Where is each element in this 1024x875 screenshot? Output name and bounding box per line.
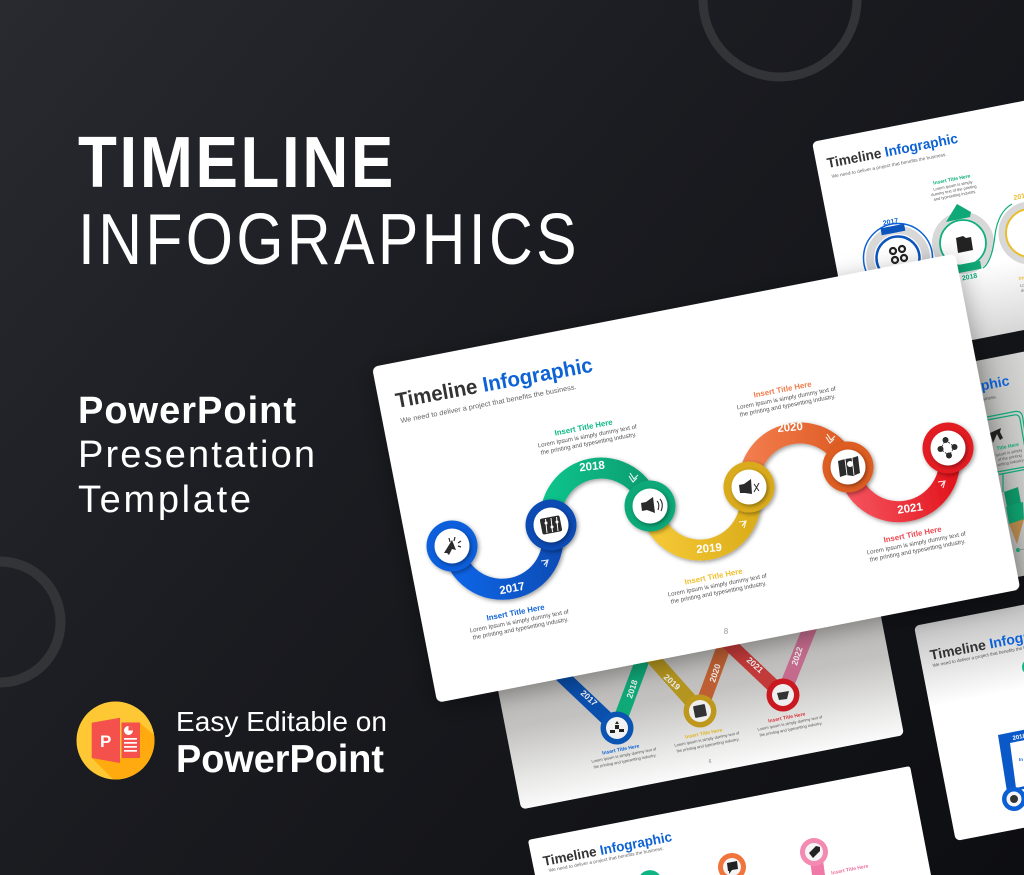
text 2017: Lorem Ipsum is simply dummy text of xyxy=(591,746,658,764)
text: 2018 xyxy=(535,413,639,457)
node: 2020 mute xyxy=(724,462,774,512)
year labels: 2020 xyxy=(777,421,803,435)
frame text xyxy=(994,441,1024,467)
text 2021: the printing and typesetting industry. xyxy=(759,720,823,737)
text: 2021: the printing and typesetting industry. xyxy=(869,538,967,564)
text 2017: Insert Title Here xyxy=(602,743,640,757)
node: 2019 speaker xyxy=(624,480,676,532)
year labels: 2020 xyxy=(707,662,723,684)
text 2021: Lorem Ipsum is simply dummy text of xyxy=(757,714,824,732)
text: yellow title partial xyxy=(1018,274,1024,293)
text 2021 xyxy=(756,708,825,738)
text: 2019: the printing and typesetting industry. xyxy=(670,580,768,606)
text: 2019: Lorem Ipsum is simply dummy text of xyxy=(667,572,768,599)
frame text: Title Here xyxy=(996,442,1020,452)
subheading: We need to deliver a project that benefits the business. xyxy=(400,384,577,425)
label: Easy Editable on PowerPoint: PowerPoint xyxy=(176,738,384,781)
orange node xyxy=(718,853,746,875)
circular item 2017: 2017 xyxy=(882,218,899,227)
year labels: 2018 xyxy=(579,460,606,474)
year labels: 2021 xyxy=(745,655,766,675)
text 2017 xyxy=(590,740,659,770)
icon: PowerPoint badge: P xyxy=(100,732,111,751)
label: Easy Editable on PowerPoint: Easy Editable on xyxy=(176,706,387,737)
text: 2017: Insert Title Here xyxy=(486,602,546,623)
frame text: Ipsum is simply xyxy=(995,447,1023,457)
green node partial xyxy=(1022,659,1024,675)
page number: 6 xyxy=(709,759,712,765)
circular item 2018 xyxy=(936,204,990,282)
timeline arcs xyxy=(452,433,950,589)
subtitle: PowerPoint Presentation Template: PowerPoint xyxy=(78,390,296,432)
slide: right pencil timeline xyxy=(700,350,1024,631)
subtitle: PowerPoint Presentation Template xyxy=(78,390,315,521)
text: green title xyxy=(929,173,978,202)
text: 2020: Lorem Ipsum is simply dummy text of xyxy=(736,385,837,412)
text: green title: dummy text of the printing xyxy=(931,183,977,197)
text: 2020 xyxy=(734,375,838,419)
subtitle: PowerPoint Presentation Template: Template xyxy=(78,479,251,521)
node: 2017 cursor xyxy=(426,520,478,572)
circular item 2017 xyxy=(864,218,932,292)
slide: top right circular timeline xyxy=(812,77,1024,363)
text: 2017 xyxy=(467,598,571,642)
label: Easy Editable on PowerPoint xyxy=(176,706,387,781)
bands xyxy=(540,615,815,728)
node: 2021 map xyxy=(822,442,874,492)
blue frame: In xyxy=(1019,757,1023,762)
frame text: of the printing xyxy=(997,453,1022,462)
text: 2017: Lorem Ipsum is simply dummy text of xyxy=(469,608,570,635)
slide: top right circular timeline: We need to deliver a project that benefits the business. xyxy=(831,152,947,179)
year labels: 2017 xyxy=(498,581,526,597)
title: Timeline Infographics: INFOGRAPHICS xyxy=(78,200,580,280)
text: 2021 xyxy=(864,520,968,564)
blue frame xyxy=(998,728,1024,811)
icon: PowerPoint badge xyxy=(76,702,154,780)
slide heading: Timeline Infographic xyxy=(826,130,959,171)
green frame xyxy=(987,411,1024,492)
text: 2019: Insert Title Here xyxy=(684,566,744,587)
slide: right pencil timeline: Timeline Infographic xyxy=(873,372,1011,414)
text: green title: and typesetting industry. xyxy=(933,189,976,202)
year labels: 2022 xyxy=(789,645,805,667)
node 2021 xyxy=(766,678,800,712)
icon: pencil xyxy=(1004,487,1024,552)
text 2019 xyxy=(673,724,742,754)
node: 2018 sliders xyxy=(526,500,576,550)
main slide xyxy=(372,254,1020,703)
text: 2018: Lorem Ipsum is simply dummy text of xyxy=(537,423,638,450)
heading: Timeline Infographic xyxy=(394,354,595,413)
year labels xyxy=(579,645,805,708)
page number: 8 xyxy=(724,627,729,636)
text: 2017: the printing and typesetting industry. xyxy=(472,616,570,642)
text: 2018: Insert Title Here xyxy=(554,417,614,438)
green node xyxy=(640,870,660,875)
text: 2020: the printing and typesetting industry. xyxy=(739,393,837,419)
text: 2021: Lorem Ipsum is simply dummy text of xyxy=(866,530,967,557)
year labels: 2019 xyxy=(696,542,722,556)
text: 2020: Insert Title Here xyxy=(753,379,813,400)
text 2019: Lorem Ipsum is simply dummy text of xyxy=(674,730,741,748)
text: 2019 xyxy=(665,562,769,606)
pink node xyxy=(800,838,828,875)
slide: bottom timeline: Timeline Infographic xyxy=(542,829,674,869)
year labels: 2018 xyxy=(624,678,640,700)
text: 2018: the printing and typesetting industry. xyxy=(540,431,638,457)
slide: bottom center zigzag timeline xyxy=(484,544,904,809)
decorative ring: top xyxy=(703,0,857,77)
slide: lower right blue box timeline xyxy=(914,582,1024,841)
text 2019: Insert Title Here xyxy=(685,727,723,741)
node: end network xyxy=(922,422,974,474)
icon: cursor xyxy=(990,428,1003,443)
circular item 2018: 2018 xyxy=(961,273,978,282)
title: Timeline Infographics: TIMELINE xyxy=(78,123,396,203)
text: green title: Insert Title Here xyxy=(933,173,971,187)
slide panel xyxy=(372,254,1020,703)
year labels xyxy=(498,421,924,597)
slide: bottom timeline: We need to deliver a project that benefits the business. xyxy=(548,846,664,873)
title: Timeline Infographics xyxy=(78,123,580,280)
arrow chevrons xyxy=(541,434,945,567)
decorative ring: left xyxy=(0,562,60,682)
circular item 2019 xyxy=(983,192,1024,268)
text 2021: Insert Title Here xyxy=(768,711,806,725)
text 2019: the printing and typesetting industry. xyxy=(676,736,740,753)
text 2017: the printing and typesetting industry. xyxy=(593,752,657,769)
year labels: 2017 xyxy=(579,688,600,708)
subtitle: PowerPoint Presentation Template: Presentation xyxy=(78,434,315,476)
slide: bottom timeline xyxy=(528,766,931,875)
text: 2021: Insert Title Here xyxy=(883,524,943,545)
node 2019 xyxy=(684,694,716,728)
year labels: 2021 xyxy=(897,501,924,517)
year labels: 2019 xyxy=(662,672,683,692)
slide: right pencil timeline: We need to deliver a project that benefits the business. xyxy=(887,394,997,420)
text: green title: Lorem Ipsum is simply xyxy=(933,179,973,192)
node 2017 xyxy=(600,712,634,744)
